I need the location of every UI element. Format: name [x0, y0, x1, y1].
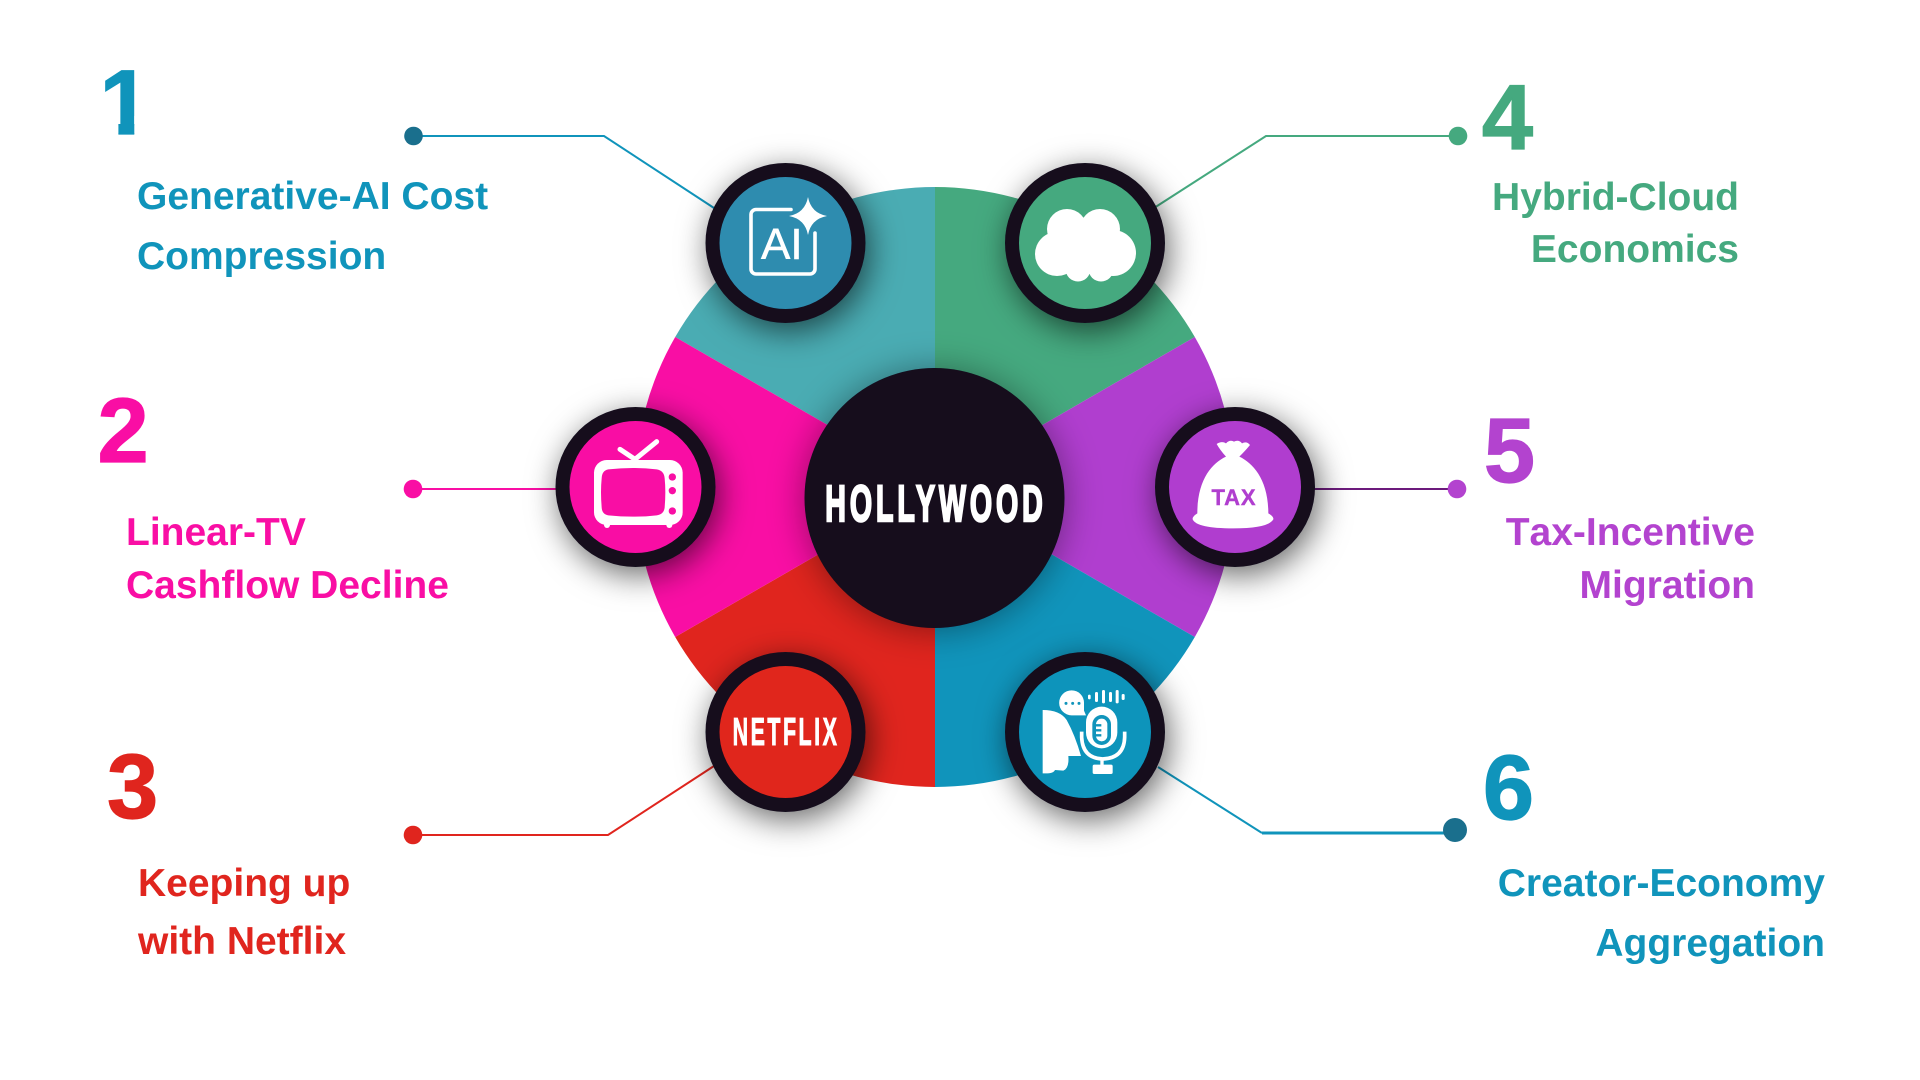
item 2: Linear-TV Cashflow Decline	[98, 380, 449, 607]
segment: purple	[935, 337, 1235, 637]
label 4: Hybrid-Cloud	[1492, 176, 1739, 219]
segment: green	[935, 187, 1195, 487]
connector lines	[413, 136, 1458, 835]
icon: tax bag	[1162, 414, 1308, 560]
item 5: Tax-Incentive Migration	[1484, 400, 1755, 607]
icon: netflix: NETFLIX	[733, 710, 839, 754]
dot 5	[1448, 480, 1466, 498]
label 2: Linear-TV	[126, 511, 306, 554]
label 5: Migration	[1580, 564, 1755, 607]
number 6: 6	[1483, 737, 1534, 839]
label 3: Keeping up	[138, 862, 350, 905]
dot 6	[1443, 818, 1467, 842]
center title: HOLLYWOOD	[825, 475, 1047, 532]
number 2: 2	[98, 380, 149, 482]
icon: podcast creator	[1012, 659, 1158, 805]
ring diagram	[635, 187, 1235, 787]
center circle	[804, 368, 1064, 628]
segment: red	[675, 487, 935, 787]
item 6: Creator-Economy Aggregation	[1483, 737, 1825, 965]
label 4: Economics	[1531, 228, 1739, 271]
number 1: 1	[100, 52, 151, 154]
number 4: 4	[1482, 67, 1533, 169]
label 2: Cashflow Decline	[126, 564, 449, 607]
segment: magenta	[635, 337, 935, 637]
dot 2	[404, 480, 422, 498]
dot 3	[404, 826, 422, 844]
label 3: with Netflix	[137, 920, 346, 963]
item 1: Generative-AI Cost Compression	[100, 52, 488, 278]
number 5: 5	[1484, 400, 1535, 502]
label 5: Tax-Incentive	[1506, 511, 1755, 554]
number 3: 3	[107, 736, 158, 838]
label 1: Generative-AI Cost	[137, 175, 488, 218]
segment: teal	[675, 187, 935, 487]
label 6: Aggregation	[1595, 922, 1825, 965]
icon: tax bag: TAX	[1212, 485, 1256, 510]
icon: AI	[712, 170, 858, 316]
dot 4	[1449, 127, 1467, 145]
icon: AI: AI	[761, 220, 803, 269]
icon: tv	[562, 414, 708, 560]
segment: blue	[935, 487, 1195, 787]
item 4: Hybrid-Cloud Economics	[1482, 67, 1739, 271]
icon: netflix	[712, 659, 858, 805]
icon: cloud	[1012, 170, 1158, 316]
label 6: Creator-Economy	[1498, 862, 1825, 905]
label 1: Compression	[137, 235, 386, 278]
dot 1	[404, 127, 423, 145]
item 3: Keeping up with Netflix	[107, 736, 350, 963]
